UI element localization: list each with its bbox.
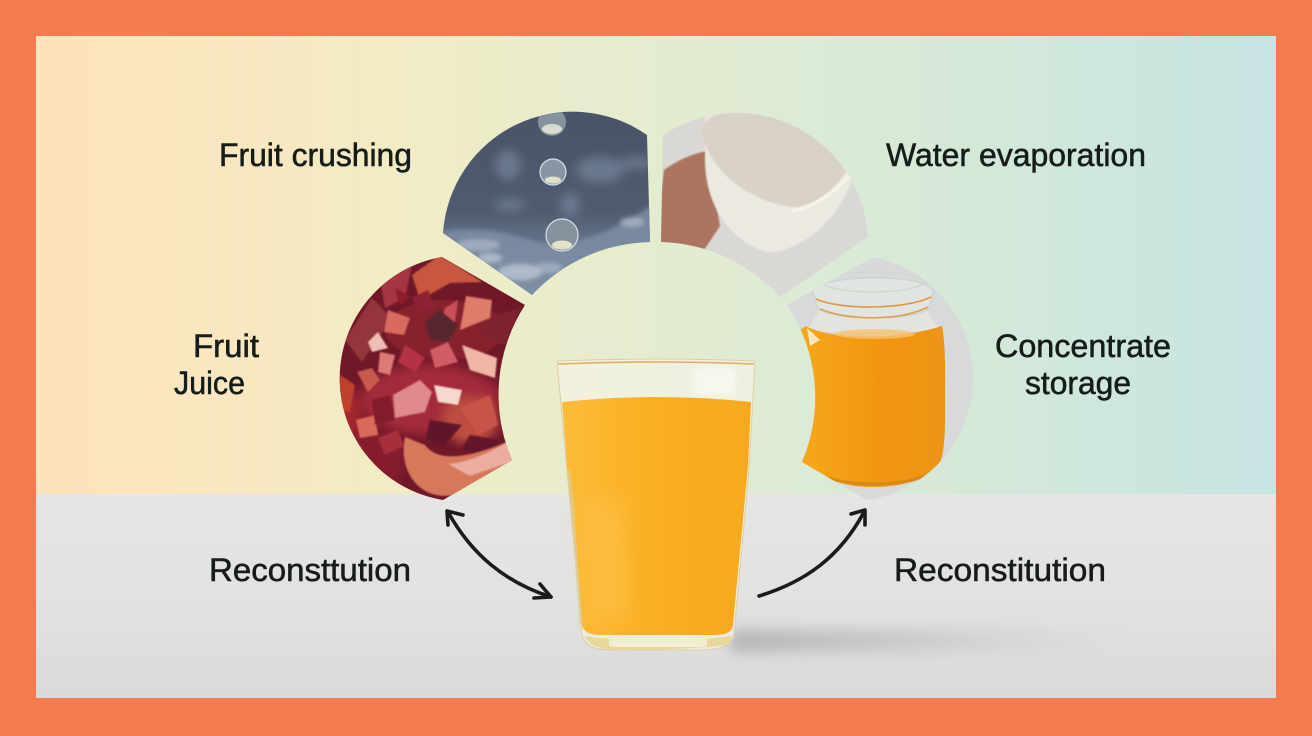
jar shoulder glass <box>806 310 942 332</box>
label: water evaporation: Water evaporation <box>886 137 1146 173</box>
label: reconstitution left: Reconsttution <box>209 552 411 588</box>
jar lid rings <box>813 272 933 318</box>
label: fruit juice: Fruit <box>193 328 259 364</box>
droplets <box>538 108 578 251</box>
glass body <box>557 359 755 650</box>
juice highlight <box>580 500 630 620</box>
hand <box>655 151 720 250</box>
bowl inside <box>701 109 847 207</box>
rim highlight <box>695 368 735 394</box>
glass shadow <box>730 628 1120 652</box>
label: reconstitution right: Reconstitution <box>894 552 1106 588</box>
table surface <box>36 494 1276 698</box>
label: fruit juice: Juice <box>174 365 245 401</box>
fruit chunks <box>338 288 520 470</box>
pastel gradient background <box>36 36 1276 498</box>
jar juice <box>800 326 945 487</box>
label: concentrate storage: storage <box>1025 365 1131 401</box>
segment: white bowl photo <box>661 112 868 297</box>
rim <box>558 362 754 364</box>
label: concentrate storage: Concentrate <box>995 328 1171 364</box>
arrow: left double-headed <box>447 511 551 598</box>
segment: concentrate jar photo <box>785 250 980 505</box>
fruit flesh background <box>337 255 505 490</box>
segment: water droplets photo <box>440 105 655 300</box>
label: fruit crushing: Fruit crushing <box>219 137 412 173</box>
segment: crushed red fruit photo <box>335 250 530 505</box>
bowl outside <box>705 110 853 252</box>
foam <box>440 205 652 300</box>
glass of orange juice <box>557 359 1120 652</box>
arrow: right <box>759 510 865 596</box>
base <box>584 636 732 650</box>
juice <box>562 397 751 635</box>
peach slice <box>404 437 515 496</box>
